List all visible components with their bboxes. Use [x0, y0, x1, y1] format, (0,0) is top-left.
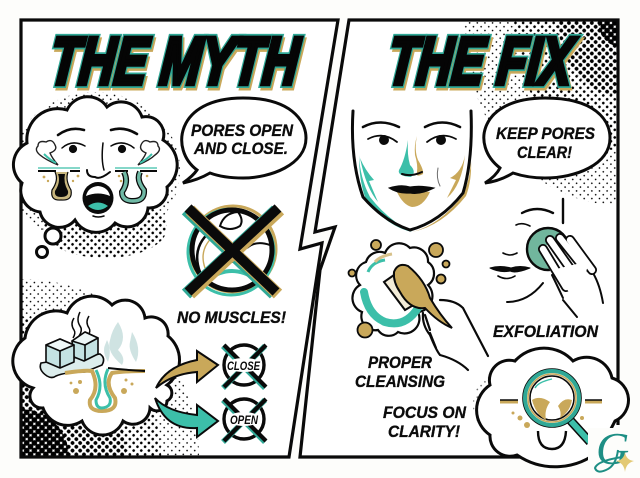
label: focus on clarity [383, 404, 467, 441]
arrow: teal to open [155, 398, 218, 437]
sparkle [616, 452, 634, 472]
magnifier handle [570, 420, 590, 442]
label: no muscles: NO MUSCLES! [177, 309, 286, 327]
pore right [115, 168, 157, 201]
eyebrows and eyes [58, 129, 137, 217]
steam right [138, 141, 159, 165]
logo [588, 423, 640, 478]
nose and lips [402, 172, 422, 175]
eyes [368, 136, 397, 142]
icon: crossed open: OPEN [230, 413, 258, 427]
small steam lines [72, 312, 90, 338]
sebum dots [512, 412, 584, 428]
label: focus on clarity: CLARITY! [388, 423, 460, 441]
nose pores in lens [532, 398, 550, 420]
thought cloud: magnifier [477, 348, 628, 467]
hand [541, 238, 603, 317]
magnifier lens [523, 369, 581, 427]
steam left [36, 141, 58, 165]
title: the myth: THE MYTH [47, 24, 304, 99]
face shading [359, 136, 471, 232]
bubbles [348, 240, 450, 338]
speech bubble: keep pores clear: CLEAR! [517, 144, 572, 162]
speech bubble: keep pores clear: KEEP PORES [496, 125, 595, 143]
speech bubble: keep pores clear [484, 98, 610, 183]
icon: crossed close: CLOSE [227, 359, 261, 373]
clean face [352, 111, 471, 232]
hand holding brush [423, 300, 488, 370]
mouth [82, 182, 114, 214]
thought cloud: myth face [13, 97, 177, 258]
icon: crossed open [223, 399, 266, 442]
exfoliation illustration [490, 199, 603, 317]
speech bubble: pores open and close [182, 98, 306, 183]
speech bubble: pores open and close: PORES OPEN [191, 122, 294, 140]
thought cloud: ice and steam [13, 296, 180, 435]
foam [352, 243, 434, 336]
cleansing illustration [348, 240, 488, 370]
pore cross-section [65, 368, 145, 411]
title: the myth: THE MYTH [48, 27, 305, 102]
chin [538, 431, 566, 449]
label: proper cleansing: CLEANSING [355, 373, 445, 391]
halftone: myth panel [10, 92, 199, 457]
label: focus on clarity: FOCUS ON [383, 404, 467, 422]
bristles [384, 275, 417, 310]
label: exfoliation: EXFOLIATION [493, 323, 599, 341]
pore left [38, 168, 80, 200]
sponge [527, 228, 569, 270]
vapour [104, 322, 138, 365]
brows [363, 122, 399, 127]
icon: crossed close [223, 345, 266, 388]
icon: crossed out muscle [186, 206, 280, 295]
skin lines [500, 400, 602, 404]
logo: G [596, 423, 629, 474]
speech bubble: pores open and close: AND CLOSE. [193, 140, 288, 158]
ice puddle [40, 354, 104, 378]
ice cube back [72, 332, 98, 361]
panel: the fix frame [300, 20, 618, 457]
brush [394, 265, 452, 328]
jaw line [352, 111, 471, 230]
title: the myth: THE MYTH [47, 24, 304, 99]
halftone: fix panel [464, 22, 616, 421]
panel: the myth frame [21, 20, 338, 457]
fingers [543, 238, 592, 287]
label: proper cleansing [355, 354, 445, 391]
label: proper cleansing: PROPER [368, 354, 432, 372]
ice cube front [46, 339, 74, 368]
arrow: gold to close [156, 351, 218, 388]
